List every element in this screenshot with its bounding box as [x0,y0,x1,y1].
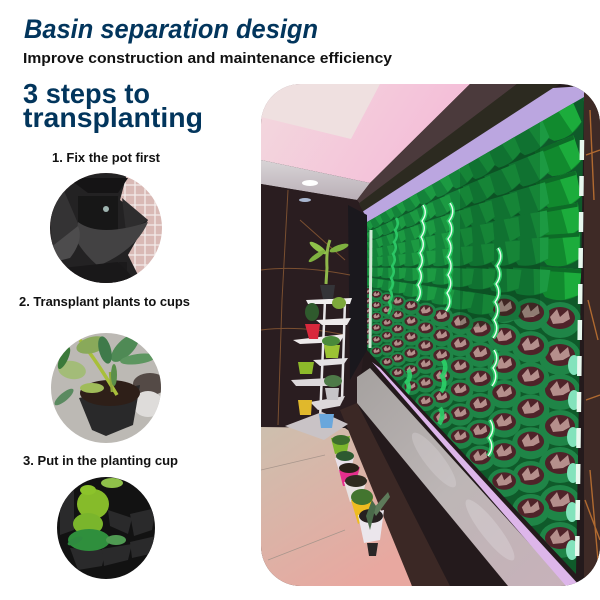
heading: 3 steps to transplanting: 3 steps to [23,78,150,109]
dark floor strip [340,403,450,586]
ceiling [261,84,470,200]
green plant [66,478,126,551]
green wall [360,97,586,574]
step 1 label: 1. Fix the pot first [52,151,161,165]
step 1 photo: pot fixed on wall [50,173,162,283]
planter columns [360,98,586,558]
heading: 3 steps to transplanting: transplanting [23,102,203,133]
pot body [50,173,148,283]
step 2 photo: plant in cup [51,333,161,443]
leaves [54,336,153,406]
dark beam [357,84,517,204]
step 3 photo: planted cup on wall [55,475,157,581]
marble wall [261,184,367,430]
led light strips [388,203,501,456]
shadow over upper middle [460,120,540,330]
banana plant [307,240,349,299]
subtitle: Improve construction and maintenance efficiency [23,50,393,67]
lavender strip [362,86,585,226]
black cups [60,486,156,570]
step 3 label: 3. Put in the planting cup [23,454,178,468]
heading: 3 steps to transplanting [23,78,203,133]
right light strip [577,140,582,572]
gloved hand [133,373,161,417]
step 2 label: 2. Transplant plants to cups [19,295,190,309]
floor pots [331,435,390,556]
pot [79,380,140,436]
mint pot highlights [566,355,578,560]
right marble [584,84,600,586]
floor [261,427,412,586]
title: Basin separation design [24,14,318,44]
main photo: vertical garden room [261,84,600,586]
metal trough [357,368,568,586]
shelf with potted plants [285,240,352,440]
